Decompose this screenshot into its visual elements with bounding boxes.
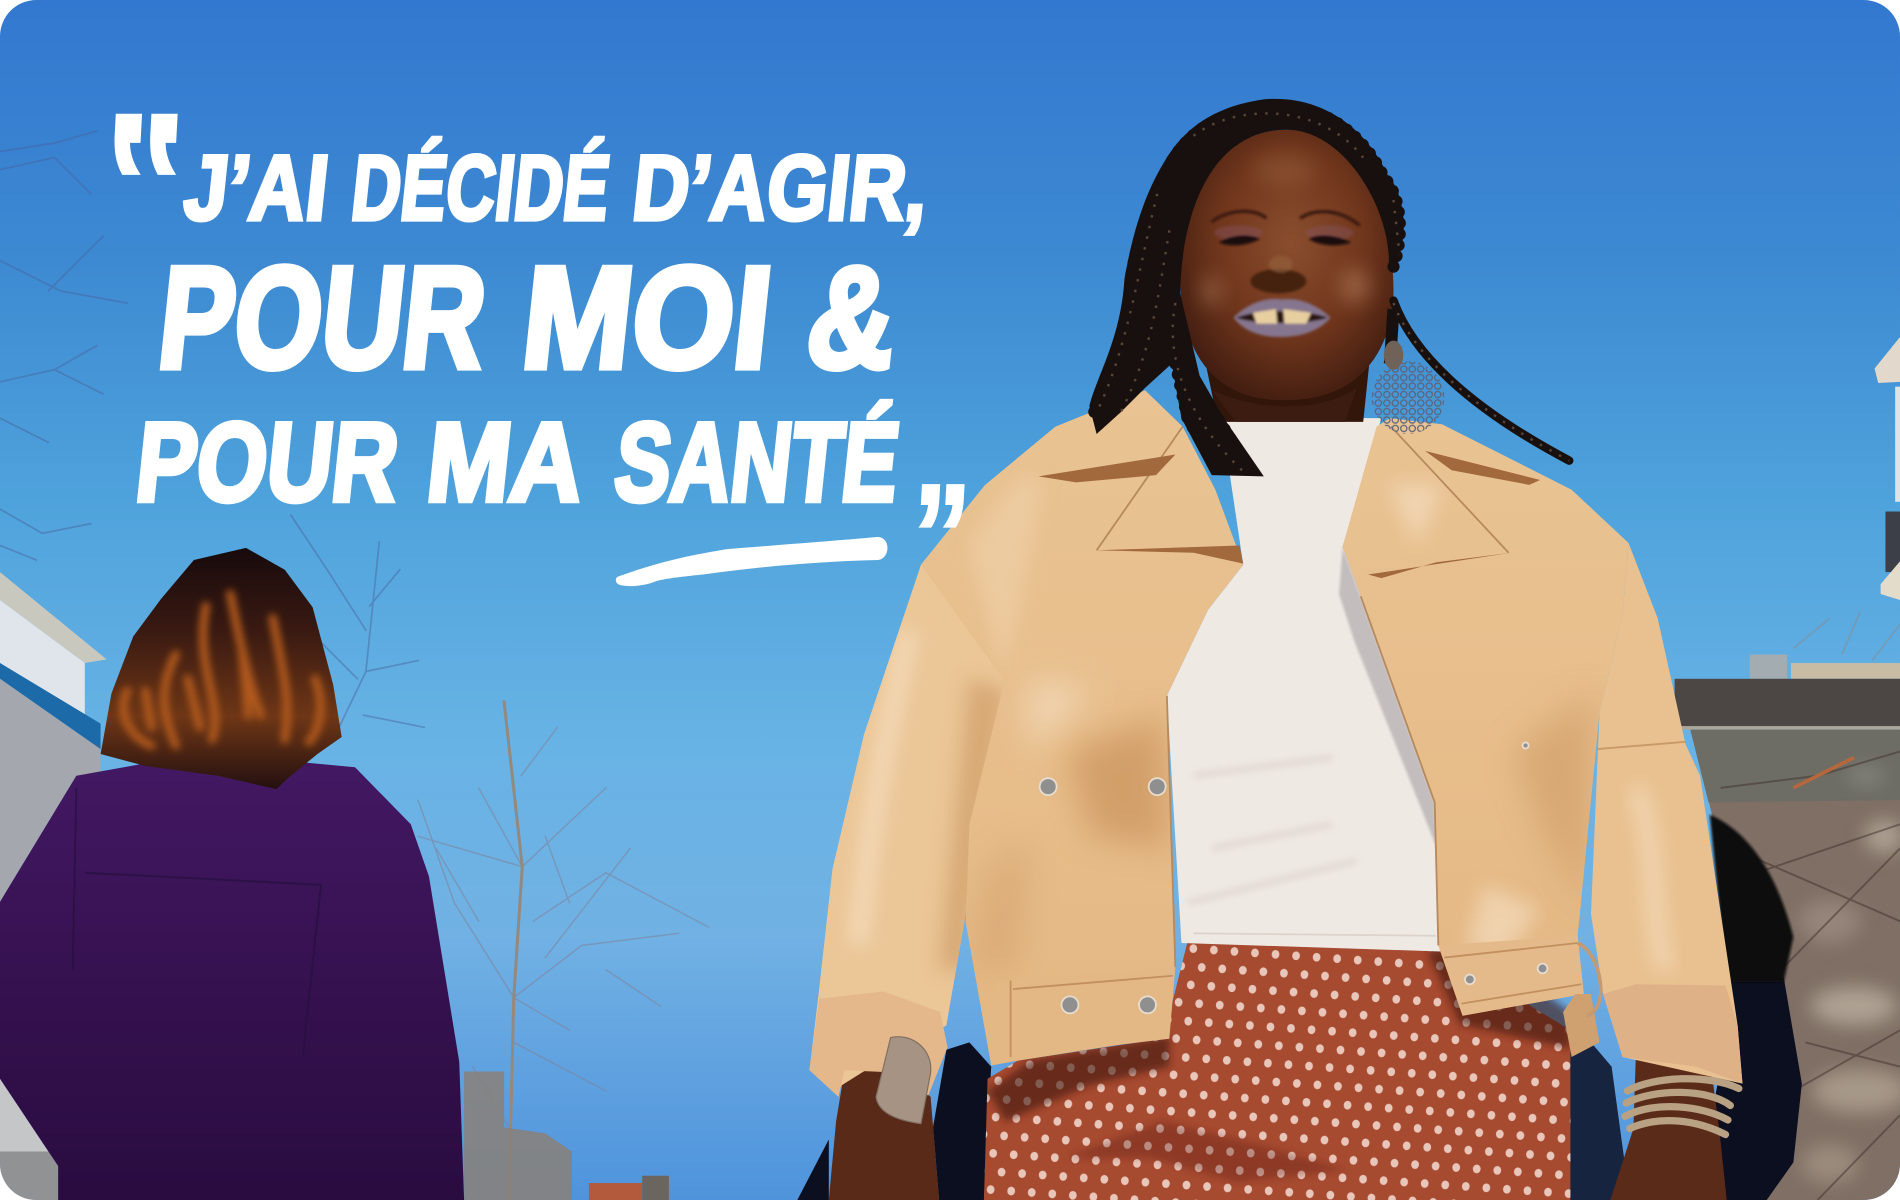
polka-dot skirt [984,942,1570,1200]
eyebrows [1212,211,1360,225]
eyes [1219,235,1351,245]
headline quote [95,70,974,616]
headline line 1: J’AI [180,136,334,239]
closing quotation mark: ” [907,454,974,616]
sleeve cuffs and jacket hem [809,936,1742,1097]
jacket seams [73,788,321,1055]
teeth [1253,309,1311,324]
woman in purple jacket, from behind [0,548,464,1200]
chin shadow [1212,388,1357,422]
long braid [1393,301,1569,461]
headline line 3: MA [422,400,590,525]
headline line 2 [152,237,904,398]
gold bangles [1625,1079,1739,1135]
lips [1234,299,1330,337]
lapel pocket shadows [1038,451,1540,578]
tan leather jacket, right front and shoulder [1343,418,1629,1016]
right forearm and hand [1610,1055,1727,1200]
background figures in dark navy [797,977,1802,1200]
small earring disc [1384,341,1403,370]
main tree trunk [504,702,522,1200]
snap buttons [1040,742,1547,1013]
headline line 3: SANTÉ [609,400,905,525]
dark afro hair, background figure [1710,815,1793,982]
headline line 2: & [800,237,904,398]
purple jacket [0,761,464,1200]
main woman [809,99,1742,1200]
metal cuff bracelet [876,1037,931,1124]
headline line 3 [131,400,905,525]
tan leather jacket, left sleeve [809,485,1006,1087]
bare trees [0,131,709,1200]
top-right building fragment [1875,337,1900,600]
white t-shirt [1167,418,1442,952]
headline line 3: POUR [131,400,404,525]
mouth [1236,311,1328,323]
opening quotation mark: ” [95,70,192,301]
neck [1206,364,1369,422]
tan leather jacket, right sleeve [1591,543,1742,1084]
underline swoosh [616,537,887,586]
braid highlights [1097,113,1569,470]
headline line 2: MOI [515,237,780,398]
face [1180,130,1393,422]
right building with tree mass [1675,612,1900,1200]
jacket seams [1097,427,1509,967]
distant rooftops [464,1072,669,1200]
left building [0,572,107,1200]
nose [1251,269,1306,293]
bumpy braid edges [1094,106,1400,470]
hair silhouette with braids [1089,99,1569,476]
facial features [1212,211,1360,337]
left forearm and hand [829,1067,939,1200]
tan leather jacket, left front [921,390,1243,1065]
cheek highlights [1201,275,1223,307]
headline line 2: POUR [152,237,494,398]
headline line 1: D’AGIR, [628,136,933,239]
headline line 1: DÉCIDÉ [347,136,615,239]
mesh earring [1372,361,1444,434]
eye shadow [1214,225,1263,240]
auburn hair [101,548,342,789]
headline line 1 [180,136,933,239]
